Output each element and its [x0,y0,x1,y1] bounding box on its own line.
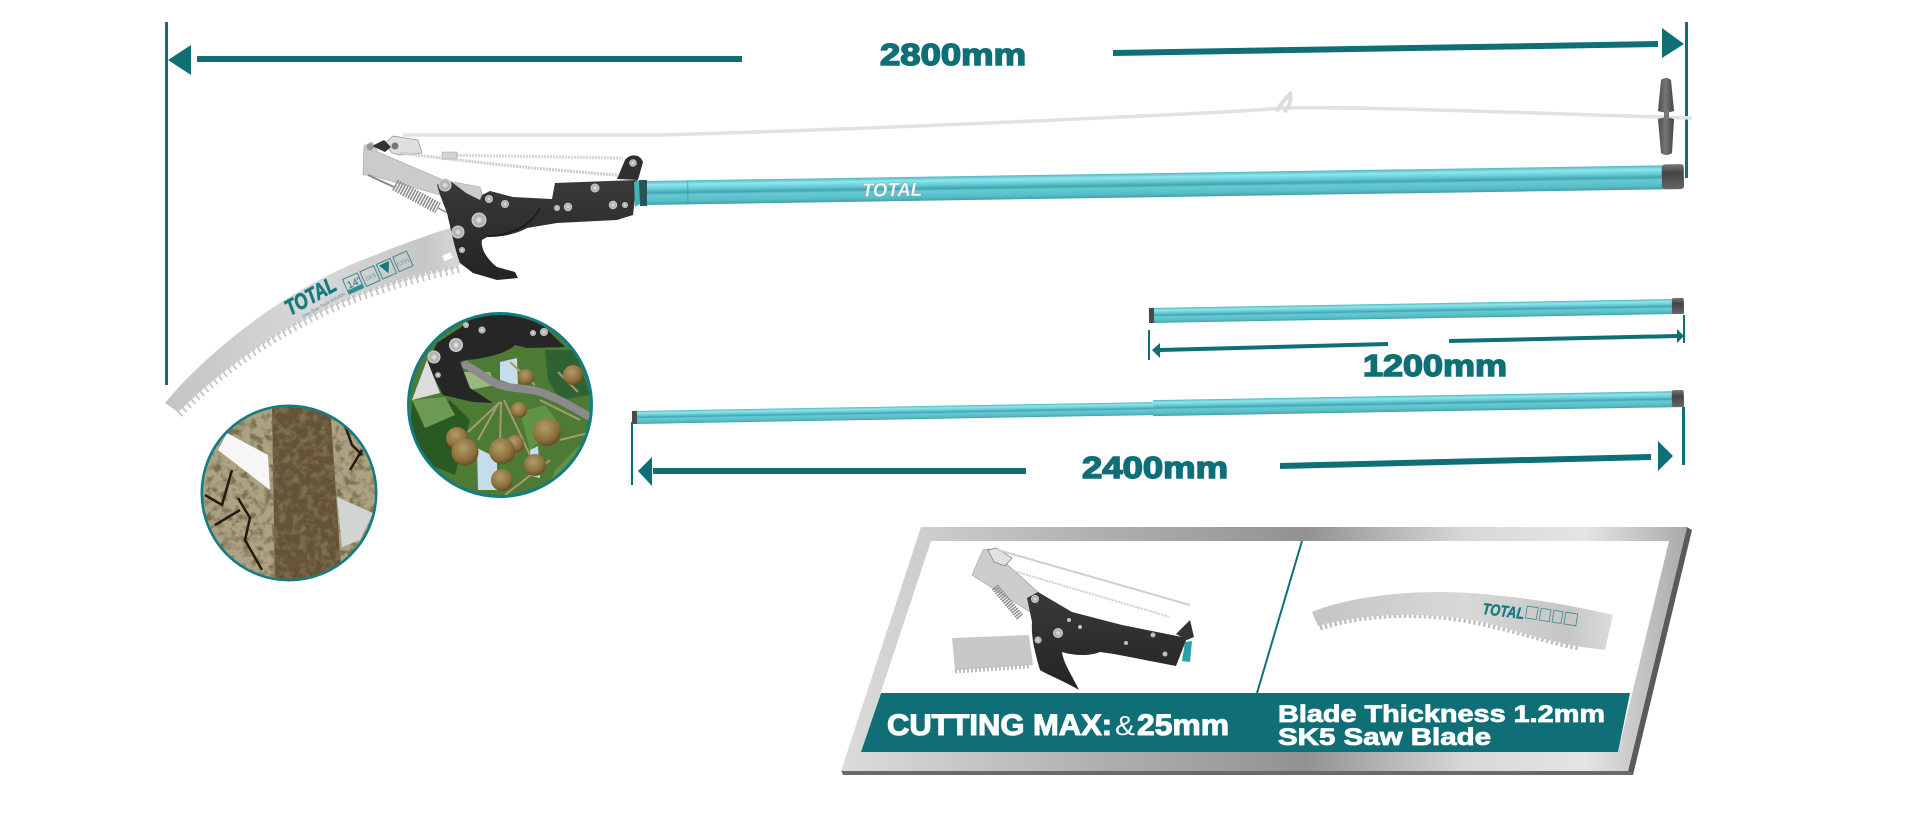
inset: sawing through trunk [200,404,380,584]
dimension: 1200mm: 1200mm [1363,348,1507,383]
pole logo: TOTAL [862,180,922,202]
extension pole 1200mm [1149,298,1684,323]
cutting wires [400,153,617,175]
extension pole 2400mm [632,390,1684,425]
saw spec boxes: 14" [346,275,364,291]
caption: cutting max: 25mm [1137,709,1229,742]
saw logo: TOTAL [280,272,341,320]
spring [395,185,438,208]
saw spec boxes: 5TPI [397,258,411,269]
main telescopic pole [645,164,1684,205]
dimension: 2800mm overall length: 2800mm [880,37,1026,72]
pulley link [385,136,422,155]
dimension: 2400mm: 2400mm [1082,450,1228,485]
mini saw logo: TOTAL [1482,601,1525,623]
bolts [438,178,628,253]
caption: blade thickness: Blade Thickness 1.2mm [1278,701,1605,728]
saw spec boxes: SK5 [365,272,378,283]
caption: cutting max: & [1115,710,1135,741]
caption: cutting max: CUTTING MAX: [887,709,1112,742]
panel: feature detail [841,527,1692,775]
teal caption band [861,693,1630,752]
rope and T-grip [403,78,1692,155]
saw slogan: One-Stop Tools Solution [301,291,346,319]
mini saw spec boxes [1525,606,1578,626]
caption: blade material: SK5 Saw Blade [1278,724,1491,751]
caption: cutting max [887,709,1229,742]
saw spec boxes [343,251,413,294]
saw blade [165,228,470,414]
branch [462,363,590,417]
hinge curve [487,208,540,236]
pole collar [634,180,640,207]
dimension: 2400mm [631,407,1685,486]
fruits [446,365,583,491]
top tab [617,155,643,180]
silver lever arm [363,142,484,202]
mini saw blade [1312,592,1613,650]
inset: cutting a fruit branch [405,310,600,500]
dimension: 2800mm overall length [165,22,1688,385]
black cutter body [437,179,637,280]
mini lopper head [952,548,1194,690]
dimension: 1200mm [1148,315,1685,383]
lopper head [363,136,647,280]
lopper jaw [428,310,565,403]
